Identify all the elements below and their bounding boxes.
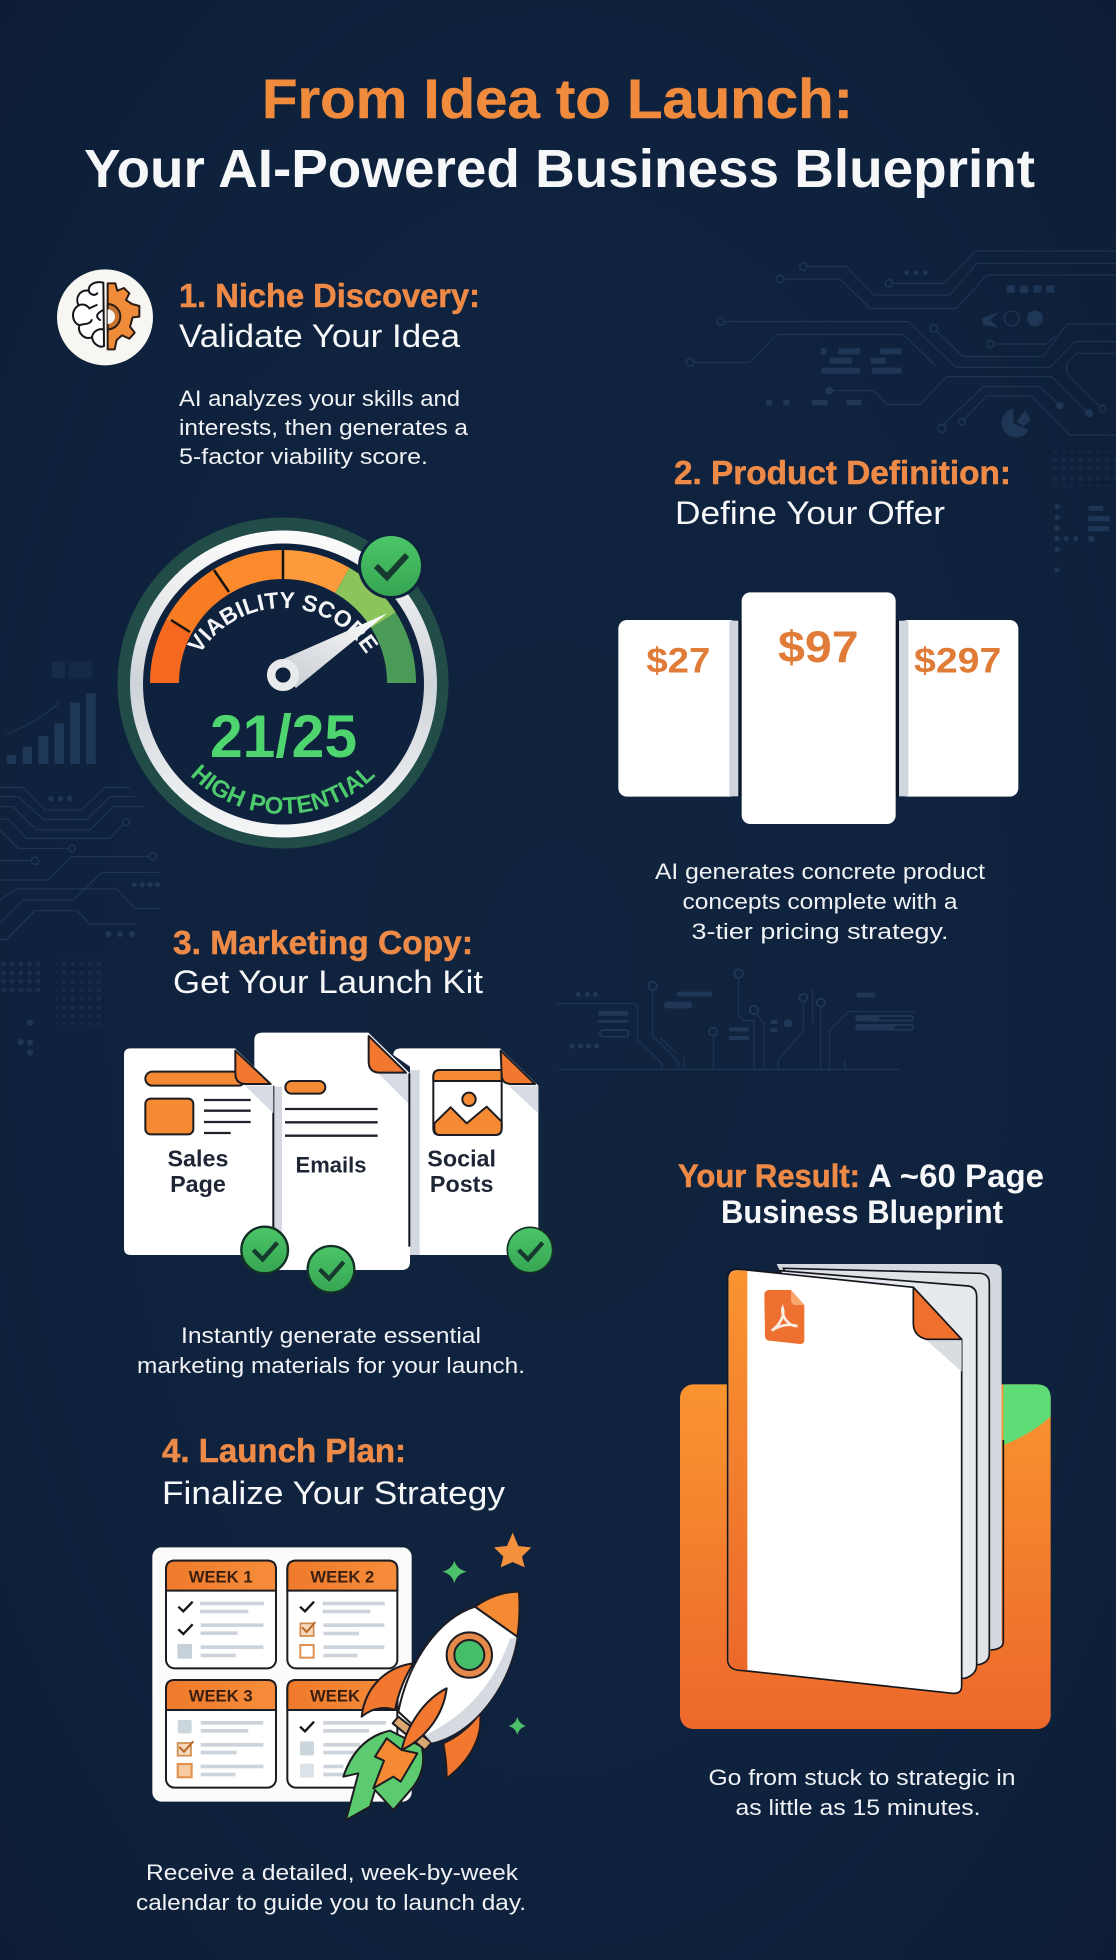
week 3 — [166, 1680, 276, 1788]
heading: step 2: 2. Product Definition: — [674, 454, 1011, 491]
week 2 — [287, 1561, 397, 1668]
title: Your AI-Powered Business Blueprint — [84, 139, 1035, 199]
text: step 4 description — [136, 1860, 526, 1915]
icon: PDF — [764, 1290, 804, 1344]
gauge status: HIGH POTENTIAL — [191, 764, 376, 814]
calendar card — [152, 1547, 412, 1802]
heading: step 1 — [179, 277, 480, 354]
text: step 3 description: Instantly generate essential — [181, 1323, 481, 1348]
card: $297 — [899, 620, 1018, 797]
title: From Idea to Launch: — [262, 67, 853, 130]
heading: step 2: Define Your Offer — [675, 495, 945, 531]
heading: step 4: 4. Launch Plan: — [162, 1432, 406, 1469]
book cover — [728, 1269, 962, 1693]
title — [84, 67, 1035, 199]
text: step 1 description: 5-factor viability score. — [179, 444, 428, 469]
text: step 1 description: AI analyzes your skills and — [179, 386, 460, 411]
week 1 — [166, 1561, 276, 1668]
text: result description — [708, 1765, 1016, 1820]
icon: rocket — [343, 1592, 519, 1820]
text: step 2 description: concepts complete with a — [682, 889, 958, 914]
heading: step 3: Get Your Launch Kit — [173, 964, 483, 1000]
text: step 3 description: marketing materials for your launch. — [137, 1353, 525, 1378]
heading: step 2 — [674, 454, 1011, 531]
week 2: WEEK 2 — [310, 1567, 374, 1586]
chart: viability score gauge — [118, 518, 448, 848]
week 1: WEEK 1 — [189, 1567, 253, 1586]
icon: sparkle small — [509, 1717, 526, 1735]
circuit pattern: left side with bar chart — [0, 662, 160, 1056]
heading: step 3: 3. Marketing Copy: — [173, 924, 473, 961]
document: social posts: Social — [427, 1146, 496, 1172]
heading: step 1: 1. Niche Discovery: — [179, 277, 480, 314]
icon: star — [494, 1533, 531, 1567]
gauge check badge — [358, 533, 424, 599]
text: step 1 description — [179, 386, 469, 469]
heading: result — [678, 1158, 1044, 1230]
heading: result: A ~60 Page — [868, 1158, 1044, 1194]
heading: step 4 — [162, 1432, 505, 1511]
gauge label: VIABILITY SCORE — [186, 592, 378, 654]
card: $97 — [738, 592, 899, 824]
heading: result: Business Blueprint — [721, 1194, 1003, 1230]
check badges — [241, 1227, 553, 1293]
heading: step 4: Finalize Your Strategy — [162, 1475, 505, 1511]
text: step 4 description: Receive a detailed, week-by-week — [146, 1860, 519, 1885]
card: $27: $27 — [646, 642, 710, 681]
marketing documents — [124, 1033, 553, 1293]
card: $297: $297 — [914, 642, 1001, 681]
text: step 2 description: AI generates concrete product — [655, 859, 986, 884]
card: $27 — [618, 620, 739, 797]
gauge segments — [164, 564, 402, 683]
document: sales page: Page — [170, 1171, 226, 1197]
circuit pattern: top right — [686, 251, 1116, 573]
pricing cards — [618, 592, 1018, 824]
document: social posts — [393, 1048, 538, 1255]
document: emails — [254, 1033, 410, 1270]
book pages — [777, 1264, 1003, 1678]
blueprint book and folder — [680, 1264, 1051, 1729]
text: step 2 description: 3-tier pricing strategy. — [692, 919, 948, 944]
gauge needle — [271, 613, 387, 688]
text: step 4 description: calendar to guide you to launch day. — [136, 1890, 526, 1915]
gauge score: 21/25 — [210, 703, 357, 770]
text: step 2 description — [655, 859, 986, 944]
icon: sparkle large — [442, 1561, 467, 1583]
week 4: WEEK — [310, 1687, 360, 1706]
text: step 3 description — [137, 1323, 525, 1378]
calendar and rocket — [152, 1533, 531, 1820]
folder — [680, 1384, 1051, 1729]
card: $97: $97 — [778, 623, 859, 672]
circuit pattern: center — [557, 969, 915, 1069]
heading: step 3 — [173, 924, 483, 1000]
week 4 — [287, 1680, 397, 1788]
text: result description: as little as 15 minutes. — [736, 1795, 980, 1820]
document: social posts: Posts — [430, 1171, 493, 1197]
document: sales page — [124, 1048, 273, 1255]
heading: step 1: Validate Your Idea — [179, 318, 460, 354]
text: step 1 description: interests, then generates a — [179, 415, 469, 440]
text: result description: Go from stuck to strategic in — [708, 1765, 1016, 1790]
heading: result: Your Result: — [678, 1158, 860, 1194]
document: sales page: Sales — [168, 1146, 229, 1172]
document: emails: Emails — [296, 1153, 366, 1178]
week 3: WEEK 3 — [189, 1687, 253, 1706]
icon: brain and gear — [57, 269, 153, 365]
